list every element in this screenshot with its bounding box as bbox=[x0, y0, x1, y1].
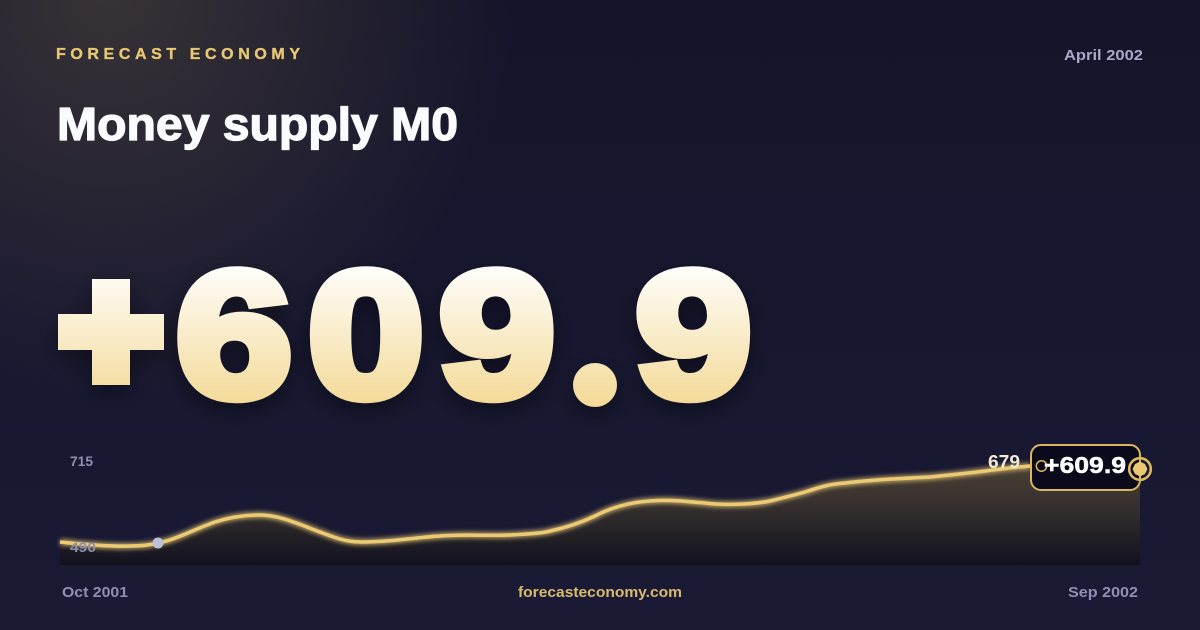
date: April 2002 bbox=[1064, 47, 1143, 64]
brand label: FORECAST ECONOMY bbox=[56, 46, 300, 63]
line glow bbox=[60, 466, 1030, 546]
headline value: 9 bbox=[636, 236, 751, 435]
chart area fill bbox=[60, 466, 1140, 565]
callout box bbox=[1031, 445, 1140, 490]
callout dot bbox=[1036, 461, 1047, 471]
headline value: . bbox=[570, 235, 620, 437]
start date: Oct 2001 bbox=[62, 584, 128, 601]
title: Money supply M0 bbox=[57, 98, 458, 150]
value callout bbox=[1031, 445, 1140, 490]
headline value bbox=[58, 229, 751, 437]
end point marker bbox=[1129, 458, 1151, 480]
headline value: + bbox=[58, 229, 164, 431]
chart: money supply line bbox=[60, 466, 1140, 565]
headline value: 6 bbox=[176, 236, 292, 435]
axis max label: 715 bbox=[70, 454, 93, 469]
data line bbox=[60, 466, 1030, 546]
axis min label: 490 bbox=[70, 540, 96, 555]
headline value: 9 bbox=[439, 236, 555, 435]
headline value: 0 bbox=[308, 236, 424, 435]
callout value: +609.9 bbox=[1044, 452, 1126, 478]
previous value label: 679 bbox=[988, 452, 1020, 472]
website: forecasteconomy.com bbox=[518, 584, 682, 601]
end date: Sep 2002 bbox=[1068, 584, 1138, 601]
start point marker bbox=[152, 538, 164, 548]
